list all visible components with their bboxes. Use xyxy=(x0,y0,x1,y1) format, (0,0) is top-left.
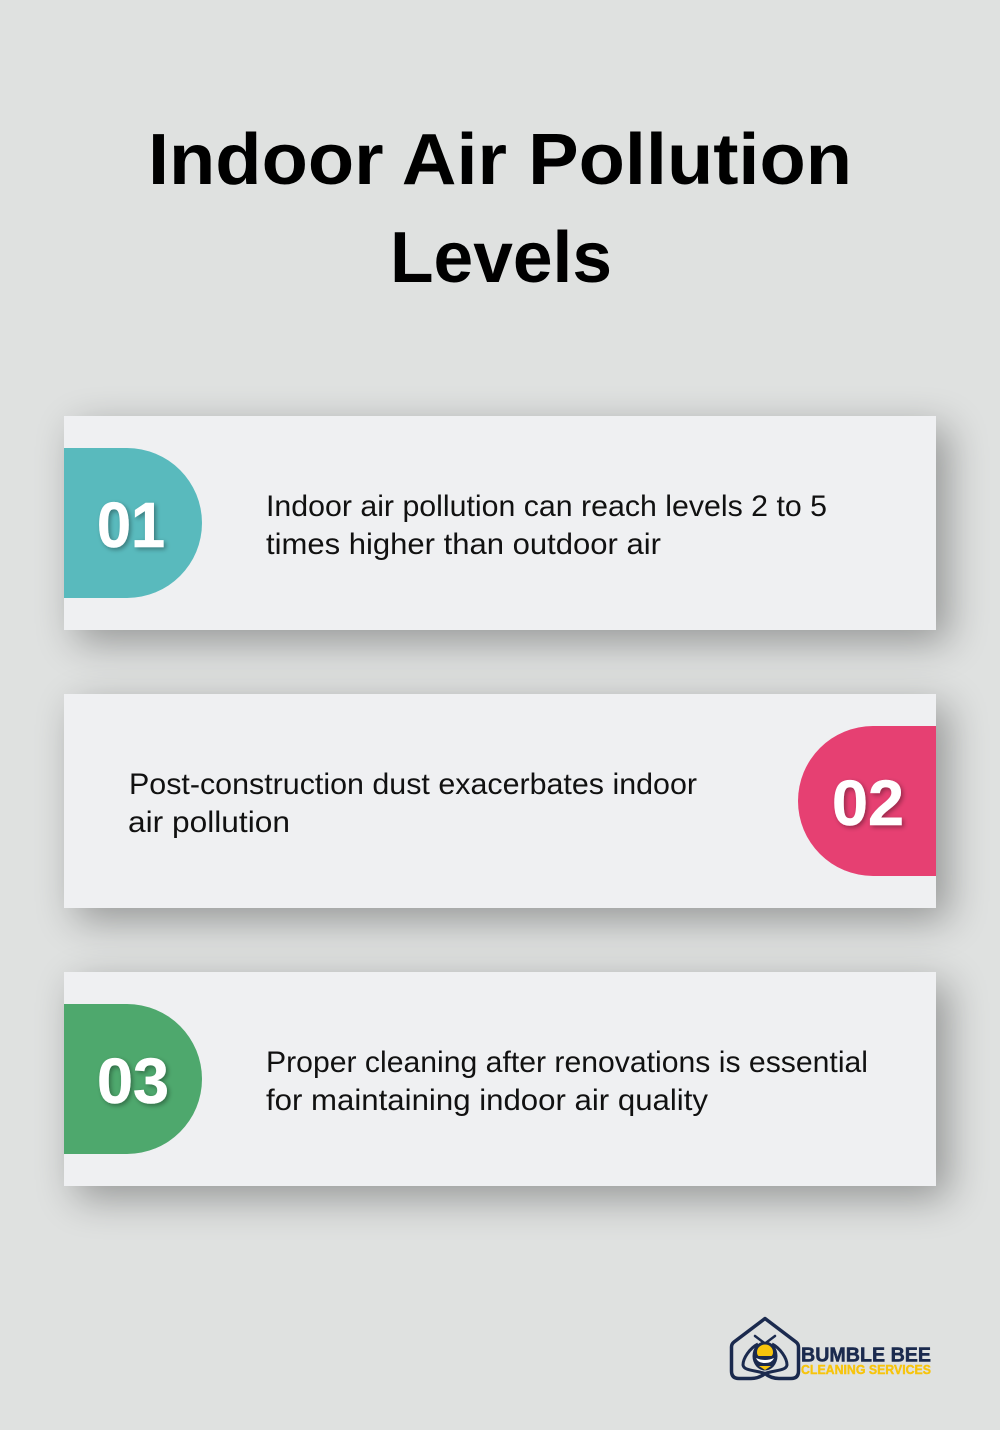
title: Indoor Air Pollution xyxy=(148,120,852,200)
text: card 01 xyxy=(266,490,827,561)
badge 02: 02 xyxy=(832,767,904,839)
text: card 03: for maintaining indoor air quality xyxy=(266,1084,708,1117)
panel: card 01 xyxy=(64,416,948,642)
title xyxy=(148,120,852,298)
panel: card 03 xyxy=(64,972,948,1198)
text: card 03 xyxy=(266,1046,868,1117)
panel: card 02 xyxy=(64,694,948,920)
text: card 01: times higher than outdoor air xyxy=(266,528,661,561)
icon: house with bee xyxy=(732,1318,798,1378)
text: card 02: air pollution xyxy=(128,806,290,839)
brand tagline: CLEANING SERVICES xyxy=(801,1363,931,1377)
brand name: BUMBLE BEE xyxy=(801,1344,931,1366)
text: card 03: Proper cleaning after renovations is essential xyxy=(266,1046,868,1079)
title: Levels xyxy=(390,218,612,298)
badge 02 xyxy=(798,726,936,876)
badge 03 xyxy=(64,1004,202,1154)
badge 01 xyxy=(64,448,202,598)
text: card 01: Indoor air pollution can reach levels 2 to 5 xyxy=(266,490,827,523)
logo: Bumble Bee Cleaning Services xyxy=(732,1318,931,1378)
text: card 02 xyxy=(128,768,697,839)
badge 01: 01 xyxy=(97,489,165,561)
text: card 02: Post-construction dust exacerbates indoor xyxy=(129,768,697,801)
badge 03: 03 xyxy=(97,1045,169,1117)
